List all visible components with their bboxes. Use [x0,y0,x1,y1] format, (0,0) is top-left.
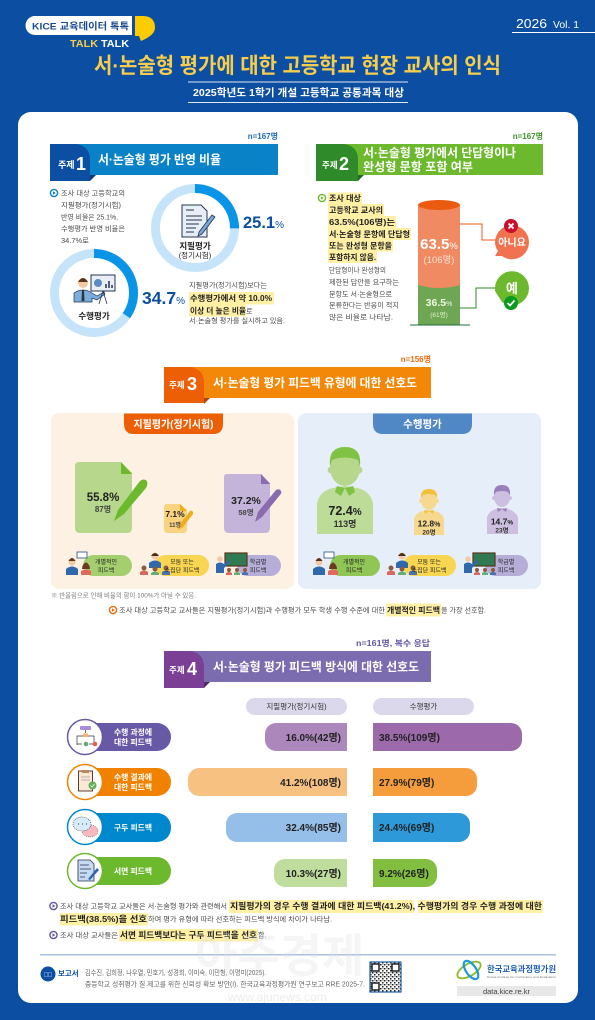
label: 개별적인 피드백: 피드백 [346,566,362,574]
column label: 지필평가 [246,698,347,715]
bullet text: survey result: 제한된 답안을 요구하는 [329,278,400,286]
QR code [370,962,401,992]
takeaway 4: 하여 평가 유형에 따라 선호하는 피드백 방식에 차이가 나타남. [148,914,332,924]
label: 모둠 또는 소집단 피드백 [387,552,456,576]
topic 3 header: 주제 [169,380,185,390]
footer: report citation: □□ [44,972,52,978]
bullet text: survey result: 고등학교 교사의 [329,205,383,215]
chart: cylinder 63.5% / 36.5%: (61명) [430,310,448,319]
label: 개별적인 피드백 [66,552,132,576]
person: 학급별 14.7%: 14.7% [491,516,513,526]
topic 2 header: 2 [339,154,349,174]
takeaway 4: 함. [258,930,266,940]
document: 학급별 37.2%: 58명 [238,507,254,517]
topic 1 header: 1 [76,154,86,174]
footer: report citation: 보고서 [58,968,79,978]
sample size 4: n=161명, 복수 응답 [356,638,431,648]
topic 3 header [164,367,431,404]
label: 개별적인 피드백: 피드백 [98,566,114,574]
label: 학급별 피드백: 학급별 [250,558,266,566]
bullet text: survey result: 63.5%(106명)는 [329,217,396,227]
document: 모둠 7.1%: 11명 [169,521,181,529]
label: 개별적인 피드백 [313,552,380,576]
tab: 지필평가: 지필평가(정기시험) [134,418,214,430]
person: 모둠 12.8% [414,489,444,536]
bullet text: survey result: 조사 대상 [329,193,362,203]
website: data.kice.re.kr [483,987,531,996]
bottom band [0,1003,595,1020]
takeaway 3: 조사 대상 고등학교 교사들은 지필평가(정기시험)과 수행평가 모두 학생 수행 수준에 대한 [119,606,386,614]
callout: 아니요 [495,219,529,259]
footer: report citation: 김수진, 김희정, 나우열, 민호기, 성경희, 이미숙, 이민형, 이명미(2025). [85,968,266,977]
logo: KICE 교육데이터 톡톡 TALK TALK: KICE 교육데이터 톡톡 [32,20,129,32]
footer divider [40,954,556,956]
footer: report citation: 중등학교 성취평가 질 제고를 위한 신뢰성 확보 방안(I). 한국교육과정평가원 연구보고 RRE 2025-7. [85,980,365,988]
bars: 38.5%(109명) [379,732,440,744]
label pill: 대한 피드백 [114,782,152,792]
bullet text: ratios: 반영 비율은 25.1%, [61,212,118,222]
row: 수행 과정에 대한 피드백 [67,720,522,754]
label: 모둠 또는 소집단 피드백: 모둠 또는 [417,559,441,566]
panel: 지필평가 feedback type [51,413,294,589]
takeaway 4: 지필평가의 경우 수행 결과에 대한 피드백(41.2%), 수행평가의 경우 수행 과정에 대한 [230,901,542,911]
callout: 아니요: 아니요 [498,237,526,249]
takeaway 4: 피드백(38.5%)을 선호 [60,914,147,924]
topic 4 header [164,651,431,688]
bars: 41.2%(108명) [280,777,341,789]
bullet text: ratios: 지필평가(정기시험) [61,200,121,210]
donut: 지필평가 25.1%: 지필평가 [179,241,211,251]
issue label: 2026 Vol.1: Vol. 1 [553,20,579,31]
takeaway 4 [50,900,543,942]
row: 수행 결과에 대한 피드백 [67,764,477,800]
donut: 지필평가 25.1%: (정기시험) [179,250,212,260]
document: 학급별 37.2% [224,474,281,533]
topic 1 header [50,144,278,181]
bars: 27.9%(79명) [379,777,434,789]
bullet text: survey result: 문항도 서·논술형으로 [329,290,393,298]
takeaway 4: 조사 대상 교사들은 [60,930,119,940]
chart: cylinder 63.5% / 36.5% [410,200,470,326]
label: 개별적인 피드백: 개별적인 [343,558,365,566]
comparison text: 지필평가(정기시험)보다는 [189,280,268,290]
label: 학급별 피드백 [216,553,281,576]
topic 1 header: 서·논술형 평가 반영 비율 [98,152,221,167]
topic 4 header: 주제 [169,665,185,675]
topic 4 header: 4 [187,659,197,679]
chart: cylinder 63.5% / 36.5%: 36.5% [426,297,452,309]
document: 모둠 7.1% [164,504,193,533]
issue label: 2026 Vol.1: 2026 [516,16,547,31]
bullet text: ratios: 34.7%로 [61,237,90,245]
column label: 지필평가: 지필평가(정기시험) [266,701,327,711]
bars: 10.3%(27명) [286,868,341,880]
document: 모둠 7.1%: 7.1% [165,509,185,519]
comparison text [189,280,285,325]
topic 4 header: 서·논술형 평가 피드백 방식에 대한 선호도 [213,659,419,674]
bullet text: survey result: 또는 완성형 문항을 [329,240,393,250]
label: 개별적인 피드백: 개별적인 [95,558,117,566]
label pill: 대한 피드백 [114,737,152,747]
takeaway 4: 조사 대상 고등학교 교사들은 서·논술형 평가와 관련해서 [60,902,227,910]
watermark: www.ajunews.com [227,990,327,1004]
sample size 3: n=156명 [401,354,431,364]
title: 서·논술형 평가에 대한 고등학교 현장 교사의 인식 [94,54,501,78]
issue label: 2026 Vol.1 [512,16,595,33]
panel: topic 3 [51,354,541,616]
donut: 수행평가 34.7%: 수행평가 [78,311,110,321]
bars [226,813,470,842]
topic 1 header: 주제 [58,159,75,170]
bars: 16.0%(42명) [286,732,341,744]
label pill [67,810,171,844]
icon: document and pen [182,205,215,237]
bullet text: survey result: 단답형이나 완성형의 [329,266,386,274]
label: 학급별 피드백: 피드백 [250,566,266,574]
comparison text: 로 [246,308,253,316]
bars: 32.4%(85명) [286,822,341,834]
person: 학급별 14.7% [487,485,518,534]
chart: cylinder 63.5% / 36.5%: (106명) [424,255,454,266]
document: 개별적인 55.8%: 55.8% [87,492,119,504]
row: 구두 피드백 [67,810,470,844]
document: 개별적인 55.8%: 87명 [95,504,111,514]
person: 개별적인 72.4%: 113명 [334,518,356,529]
tab: 지필평가 [124,414,223,434]
bullet text: survey result: 분류한다는 반응이 적지 [329,300,399,310]
tab: 수행평가: 수행평가 [403,418,442,430]
watermark: 아주경제 [195,930,364,982]
callout: 예 [495,271,529,310]
sample size 2: n=167명 [513,131,543,141]
arrow: connector to 아니요 [460,224,497,240]
comparison text: 수행평가에서 약 10.0% [190,293,272,303]
subtitle: 2025학년도 1학기 개설 고등학교 공통과목 대상 [193,86,404,99]
takeaway 3 [109,604,486,616]
bullet text: ratios [50,188,126,245]
person: 모둠 12.8%: 20명 [422,528,436,536]
person: 개별적인 72.4%: 72.4% [328,504,362,518]
label pill [67,764,171,800]
logo: KICE 교육데이터 톡톡 TALK TALK: TALK TALK [70,38,129,50]
footnote: ※ 반올림으로 인해 비율의 합이 100%가 아닐 수 있음. [51,590,196,600]
logo: 한국교육과정평가원: 한국교육과정평가원 [487,964,556,974]
topic 2 header: 서·논술형 평가에서 단답형이나 [363,145,516,160]
label pill: 서면 피드백 [114,866,152,876]
tab: 수행평가 [373,414,472,434]
value 25.1%: 25.1% [243,214,284,232]
bars [274,859,437,887]
logo: KICE 교육데이터 톡톡 TALK TALK [26,16,155,50]
label pill [67,854,171,888]
takeaway 3: 개별적인 피드백 [387,605,440,615]
bars [188,768,477,796]
column label: 수행평가: 수행평가 [410,701,437,711]
website [457,986,556,996]
takeaway 4: 서면 피드백보다는 구두 피드백을 선호 [120,930,257,940]
bullet text: survey result: 않은 비율로 나타남. [329,312,393,322]
label pill: 수행 결과에 [114,772,152,782]
person: 모둠 12.8%: 12.8% [418,518,441,528]
bullet text: survey result: 포함하지 않음. [329,252,376,262]
label: 모둠 또는 소집단 피드백 [140,552,209,576]
bullet text: survey result [318,192,411,322]
topic 3 header: 3 [187,374,197,394]
document: 개별적인 55.8% [75,462,147,533]
comparison text: 서·논술형 평가를 실시하고 있음. [189,316,285,325]
logo: 한국교육과정평가원: Korea Institute for Curriculum and Evaluation [487,975,556,979]
callout: 예: 예 [506,281,518,296]
column label: 수행평가 [373,698,474,715]
bars [265,723,522,751]
label: 모둠 또는 소집단 피드백: 소집단 피드백 [165,566,199,574]
comparison text: 이상 더 높은 비율 [190,306,246,316]
panel: topic 1 [50,131,285,332]
topic 2 header [316,144,543,181]
logo: 한국교육과정평가원 [455,958,556,982]
bullet text: ratios: 수행평가 반영 비율은 [61,224,126,233]
sample size 1: n=167명 [248,131,278,141]
panel: topic 4 [50,638,543,942]
value 34.7%: 34.7% [142,288,185,308]
topic 2 header: 완성형 문항 포함 여부 [363,159,473,174]
donut: 지필평가 25.1% [156,188,234,268]
footer: report citation [40,966,365,988]
label: 학급별 피드백: 피드백 [498,566,514,574]
icon: presenter and board [74,275,115,304]
person: 학급별 14.7%: 23명 [495,526,509,534]
topic 3 header: 서·논술형 평가 피드백 유형에 대한 선호도 [213,375,417,390]
bullet text: ratios: 조사 대상 고등학교의 [61,188,125,198]
label pill [67,720,171,754]
chart: cylinder 63.5% / 36.5%: 63.5% [420,236,458,253]
row: 서면 피드백 [67,854,437,888]
panel: 수행평가 feedback type [298,413,541,589]
label pill: 구두 피드백 [114,822,152,832]
takeaway 3: 을 가장 선호함. [441,606,486,614]
panel: topic 2 [316,131,543,326]
label: 모둠 또는 소집단 피드백: 모둠 또는 [170,559,194,566]
donut: 수행평가 34.7% [54,254,134,332]
bars: 9.2%(26명) [379,868,429,880]
label: 학급별 피드백: 학급별 [498,558,514,566]
label pill: 수행 과정에 [114,727,152,737]
label: 학급별 피드백 [464,553,528,576]
bullet text: survey result: 서·논술형 문항에 단답형 [329,229,410,239]
label: 모둠 또는 소집단 피드백: 소집단 피드백 [412,566,446,574]
topic 2 header: 주제 [322,160,338,170]
person: 개별적인 72.4% [317,447,373,534]
document: 학급별 37.2%: 37.2% [231,495,262,507]
bars: 24.4%(69명) [379,822,434,834]
arrow: connector to 예 [460,288,496,308]
